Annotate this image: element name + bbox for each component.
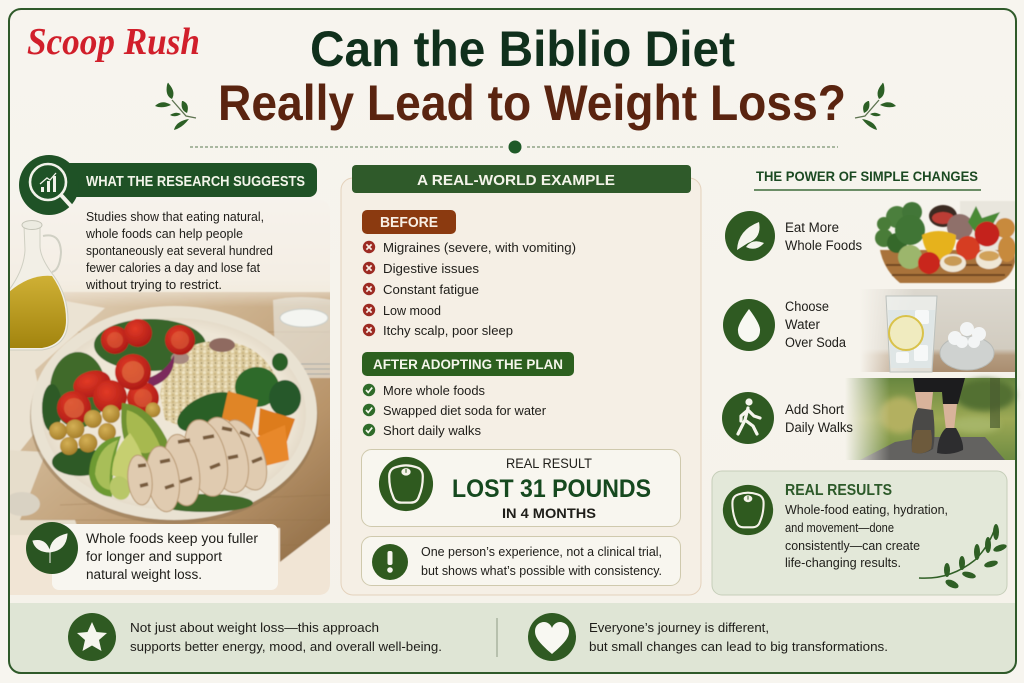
after list: Swapped diet soda for water xyxy=(383,403,547,418)
research text: whole foods can help people xyxy=(85,227,243,241)
icon: right title sprig xyxy=(855,83,896,130)
panel: real results: REAL RESULTS xyxy=(785,482,892,499)
note card xyxy=(362,536,680,586)
tomatoes xyxy=(57,319,195,425)
callout: whole foods: Whole foods keep you fuller xyxy=(86,531,259,546)
research text: fewer calories a day and lose fat xyxy=(86,261,260,275)
research text: spontaneously eat several hundred xyxy=(86,244,273,258)
item: add short walks: Add Short xyxy=(785,402,844,417)
before badge xyxy=(362,210,456,234)
after list: More whole foods xyxy=(383,383,485,398)
item: choose water: Over Soda xyxy=(785,335,846,350)
before list xyxy=(363,240,576,338)
result card: IN 4 MONTHS xyxy=(502,505,596,521)
before list: Digestive issues xyxy=(383,261,479,276)
bowl xyxy=(30,400,318,524)
panel: real results: consistently—can create xyxy=(785,539,920,553)
panel: real-world example xyxy=(341,165,701,595)
item: choose water: Choose xyxy=(785,299,829,314)
photo: salad bowl on wooden table xyxy=(10,274,330,595)
panel: real results: Whole-food eating, hydration, xyxy=(785,503,948,517)
item: choose water: Water xyxy=(785,317,820,332)
callout: whole foods: natural weight loss. xyxy=(86,567,202,582)
chicken xyxy=(126,416,268,513)
footer text right: Everyone’s journey is different, xyxy=(589,620,769,635)
footer band xyxy=(9,603,1016,673)
header: what the research suggests: WHAT THE RESEARCH SUGGESTS xyxy=(86,174,305,190)
callout: whole foods xyxy=(26,522,278,590)
before list: Migraines (severe, with vomiting) xyxy=(383,240,576,255)
item: choose water xyxy=(723,299,846,351)
footer text right xyxy=(589,620,888,654)
greens xyxy=(50,352,106,428)
before badge: BEFORE xyxy=(380,215,438,231)
quinoa xyxy=(160,341,280,428)
icon: heart xyxy=(528,613,576,661)
spinach xyxy=(235,367,279,407)
icon: walker xyxy=(738,398,760,434)
result card: REAL RESULT xyxy=(506,456,592,471)
footer text left: Not just about weight loss—this approach xyxy=(130,620,379,635)
icon: sprout xyxy=(33,534,67,563)
chickpeas xyxy=(49,402,160,455)
photo: olive oil bottle xyxy=(9,220,68,350)
panel: real-world example: A REAL-WORLD EXAMPLE xyxy=(417,172,615,189)
footer text left: supports better energy, mood, and overall well-being. xyxy=(130,639,442,654)
panel: real results: life-changing results. xyxy=(785,556,901,570)
panel: real results xyxy=(712,471,1008,595)
onion xyxy=(148,355,174,388)
note card: but shows what’s possible with consistency. xyxy=(421,563,662,578)
icon: water drop xyxy=(738,309,760,342)
header: what the research suggests xyxy=(19,155,317,215)
photo: water glass and ice bowl xyxy=(860,289,1016,372)
title: Really Lead to Weight Loss? xyxy=(218,75,846,131)
item: add short walks: Daily Walks xyxy=(785,420,853,435)
item: eat more whole foods: Eat More xyxy=(785,220,839,235)
avocado xyxy=(121,403,167,462)
footer text right: but small changes can lead to big transformations. xyxy=(589,639,888,654)
callout: whole foods: for longer and support xyxy=(86,549,222,564)
sweet potato xyxy=(222,391,258,431)
icon: left title sprig xyxy=(155,83,196,130)
photo: walking legs xyxy=(845,378,1016,460)
napkin xyxy=(10,301,105,452)
icon: leaves xyxy=(737,222,764,250)
before list: Low mood xyxy=(383,303,441,318)
water glass xyxy=(273,297,332,378)
title xyxy=(218,21,846,131)
after list: Short daily walks xyxy=(383,423,481,438)
item: eat more whole foods: Whole Foods xyxy=(785,238,862,253)
icon: magnifier chart xyxy=(30,164,71,206)
panel: real results: and movement—done xyxy=(785,521,894,535)
icon: leaf branch xyxy=(919,524,1008,590)
title: Can the Biblio Diet xyxy=(310,21,735,77)
item: add short walks xyxy=(722,392,853,444)
heading: power of simple changes: THE POWER OF SIMPLE CHANGES xyxy=(756,168,978,184)
after badge: AFTER ADOPTING THE PLAN xyxy=(373,357,563,372)
footer text left xyxy=(130,620,442,654)
result card xyxy=(362,450,680,526)
result card: LOST 31 POUNDS xyxy=(452,475,651,503)
before list: Constant fatigue xyxy=(383,282,479,297)
research text: without trying to restrict. xyxy=(85,278,222,292)
research text: Studies show that eating natural, xyxy=(86,210,264,224)
item: eat more whole foods xyxy=(725,211,862,261)
research text xyxy=(85,210,273,292)
photo: vegetable basket xyxy=(875,201,1016,283)
logo: Scoop Rush: Scoop Rush xyxy=(27,21,200,63)
before list: Itchy scalp, poor sleep xyxy=(383,323,513,338)
after list xyxy=(363,383,547,438)
note card: One person’s experience, not a clinical trial, xyxy=(421,544,662,559)
icon: star xyxy=(68,613,116,661)
after badge xyxy=(362,352,574,376)
